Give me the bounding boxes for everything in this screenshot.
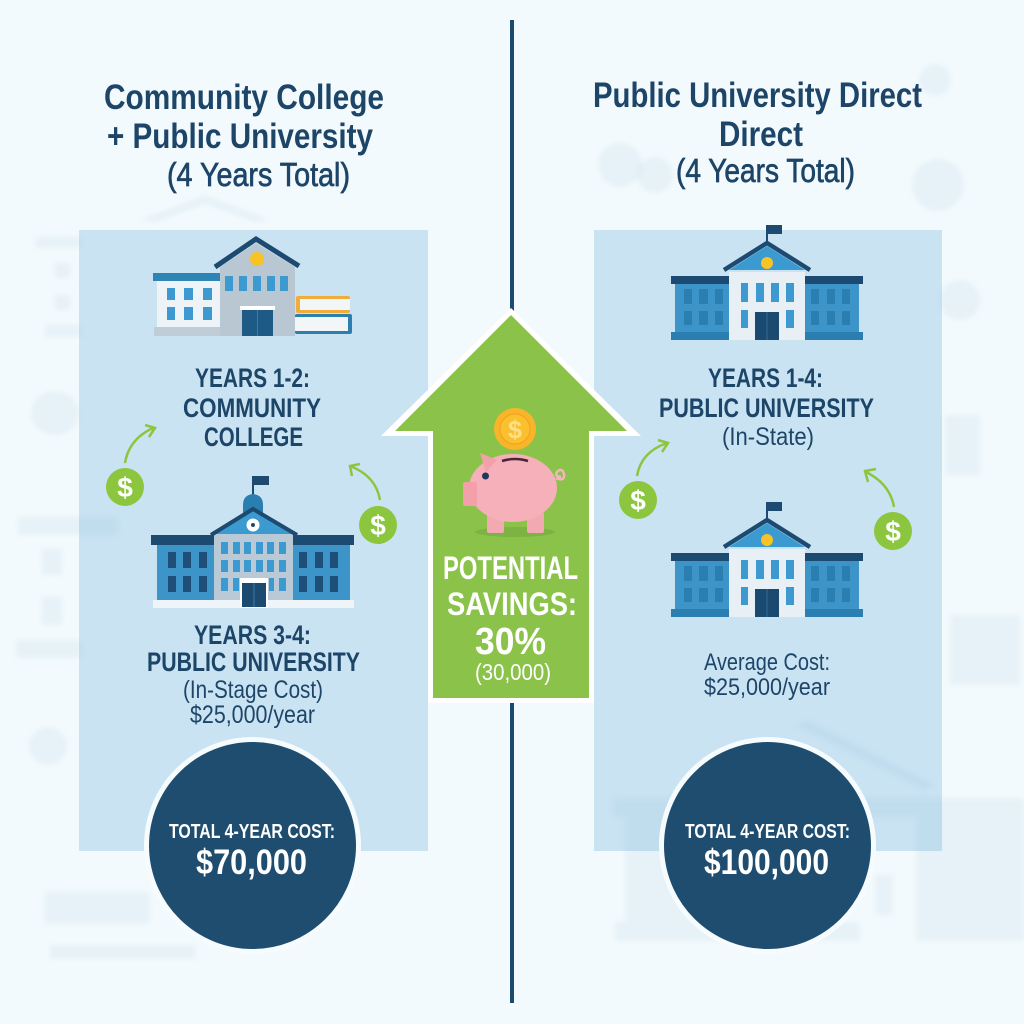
icon: dollar coin with arrow, right column right — [865, 469, 912, 550]
heading: right column title — [593, 76, 922, 189]
callout: left total cost circle: $70,000 — [196, 843, 307, 882]
heading: left column title: + Public University — [107, 117, 373, 156]
callout: right total cost circle — [662, 740, 874, 952]
text: years 1-2 community college — [183, 363, 321, 452]
text: years 1-4 public university: PUBLIC UNIVERSITY — [659, 393, 874, 423]
heading: left column title: Community College — [104, 78, 384, 117]
text: years 3-4 public university: YEARS 3-4: — [194, 620, 311, 650]
text: potential savings — [443, 550, 578, 685]
icon: gold coin — [494, 408, 536, 450]
icon: university building, right column bottom — [671, 502, 863, 617]
heading: left column title — [104, 78, 384, 193]
icon: dollar coin with arrow, right column right: $ — [885, 516, 901, 547]
icon: dollar coin with arrow, left column right: $ — [370, 510, 386, 541]
panel: public university direct background — [594, 230, 942, 851]
text: years 1-4 public university — [659, 363, 874, 451]
text: potential savings: POTENTIAL — [443, 550, 578, 586]
text: potential savings: 30% — [475, 621, 546, 663]
text: average cost — [704, 649, 830, 701]
icon: community college building with books — [153, 239, 352, 336]
heading: right column title: Direct — [719, 115, 803, 154]
text: potential savings: SAVINGS: — [447, 586, 577, 622]
text: years 1-2 community college: COLLEGE — [204, 422, 303, 452]
text: potential savings: (30,000) — [475, 659, 551, 685]
text: years 1-4 public university: (In-State) — [722, 423, 814, 451]
icon: dollar coin with arrow, left column right — [350, 464, 397, 544]
callout: left total cost circle: TOTAL 4-YEAR COST: — [169, 821, 335, 843]
callout: right total cost circle: $100,000 — [704, 843, 829, 882]
text: years 3-4 public university: PUBLIC UNIVERSITY — [147, 647, 360, 677]
icon: dollar coin with arrow, left column left: $ — [117, 472, 133, 503]
center divider line — [510, 20, 514, 1003]
icon: gold coin: $ — [508, 416, 522, 444]
text: years 3-4 public university — [147, 620, 360, 729]
panel: community college path background — [79, 230, 428, 851]
text: years 1-2 community college: COMMUNITY — [183, 393, 321, 423]
arrow: potential savings — [381, 308, 641, 703]
heading: left column title: (4 Years Total) — [167, 156, 350, 193]
callout: left total cost circle — [146, 740, 358, 952]
callout: right total cost circle: TOTAL 4-YEAR COST: — [685, 821, 850, 843]
text: years 3-4 public university: (In-Stage Cost) — [183, 676, 323, 704]
icon: piggy bank — [463, 453, 564, 537]
icon: public university building with dome — [151, 476, 354, 608]
text: years 1-2 community college: YEARS 1-2: — [195, 363, 310, 393]
text: average cost: $25,000/year — [704, 674, 830, 701]
icon: university building, right column top — [671, 225, 863, 340]
text: average cost: Average Cost: — [704, 649, 830, 676]
icon: dollar coin with arrow, right column left: $ — [630, 485, 646, 516]
heading: right column title: Public University Direct — [593, 76, 922, 115]
icon: dollar coin with arrow, right column left — [619, 440, 668, 519]
text: years 3-4 public university: $25,000/year — [190, 701, 315, 729]
heading: right column title: (4 Years Total) — [676, 152, 855, 189]
icon: dollar coin with arrow, left column left — [106, 425, 155, 506]
text: years 1-4 public university: YEARS 1-4: — [708, 363, 823, 393]
